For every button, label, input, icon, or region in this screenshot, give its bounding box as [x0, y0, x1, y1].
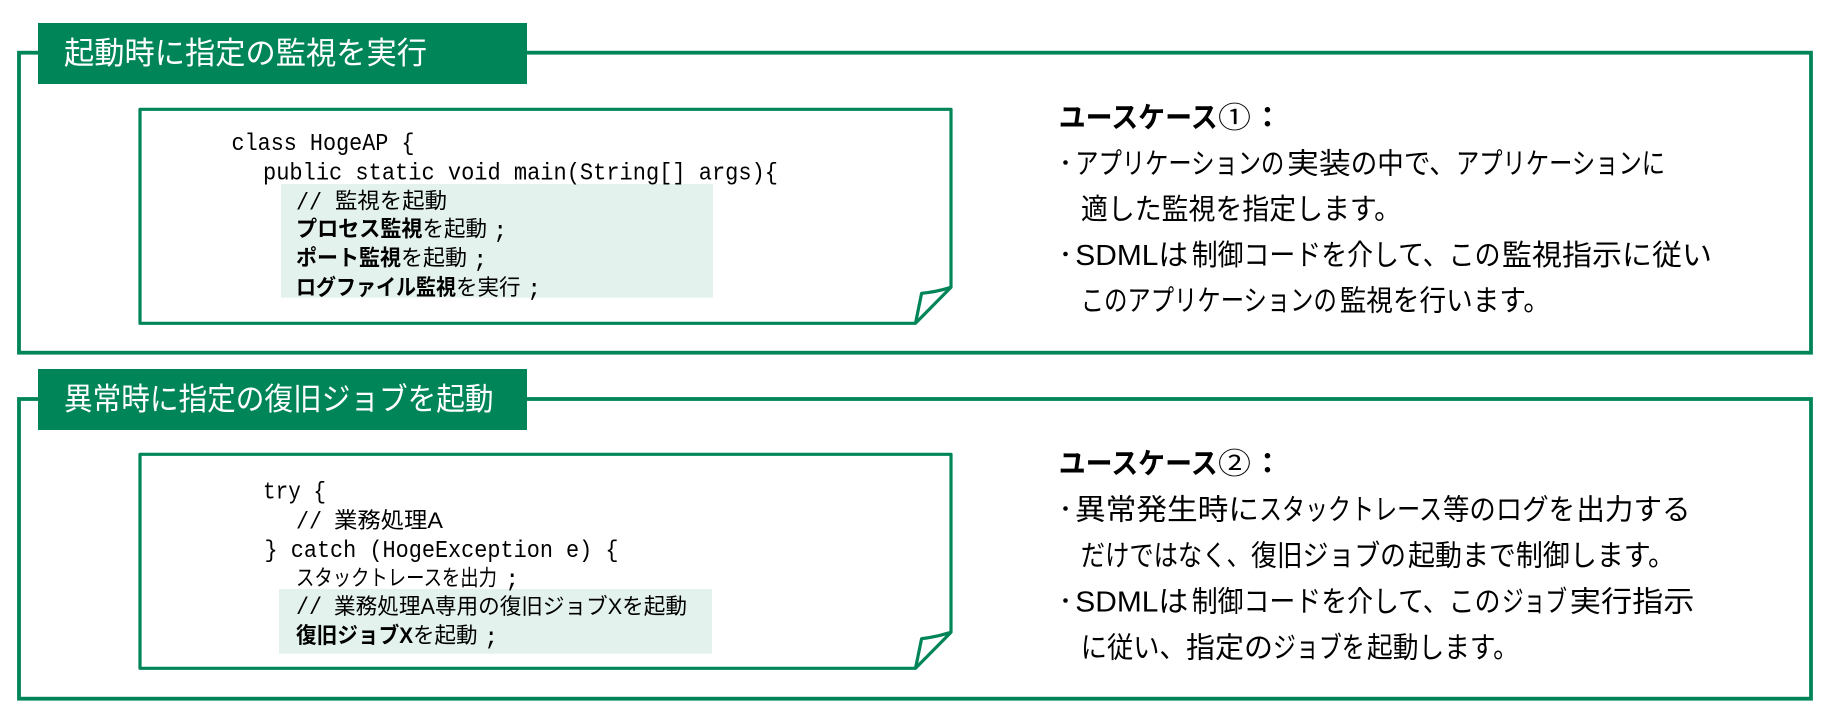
use case 1 text: 監視指示に従い: [1502, 239, 1712, 272]
code note: startup monitoring: class HogeAP {: [232, 131, 414, 158]
use case 1 text: 監視を行います。: [1340, 285, 1550, 318]
use case 1 text: アプリケーションに: [1456, 148, 1665, 180]
use case 1 text: ：: [1253, 102, 1282, 134]
use case 1 text: 制御コードを介して、この: [1192, 239, 1500, 272]
use case 1 text: SDMLは: [1075, 240, 1188, 272]
use case 2 text: 異常発生時に: [1075, 493, 1259, 526]
code note: recovery job: ;: [505, 568, 519, 594]
use case 1 text: 実装: [1287, 147, 1351, 180]
use case 2 text: 起動します。: [1367, 631, 1519, 664]
code note: recovery job: [140, 454, 951, 668]
code note: startup monitoring: 監視を起動: [335, 188, 447, 214]
heading: recovery job: [38, 369, 527, 430]
heading: startup monitoring: [38, 23, 527, 84]
use case 2 text: ：: [1253, 448, 1282, 480]
code note: recovery job: //: [296, 510, 322, 537]
code note: startup monitoring: ;: [473, 248, 487, 275]
panel: recovery job: [19, 369, 1811, 699]
code note: startup monitoring: ;: [493, 219, 507, 246]
use case 2 text: ジョブ: [1502, 585, 1567, 618]
code note: recovery job: 復旧ジョブX: [296, 623, 413, 648]
code note: recovery job: 業務処理A専用の復旧ジョブXを起動: [334, 594, 687, 619]
use case 2 text: 出力する: [1576, 493, 1691, 526]
code note: startup monitoring: ログファイル監視: [296, 275, 456, 300]
use case 2 text: に従い、: [1081, 631, 1186, 664]
use case 2 text: [1059, 448, 1694, 664]
code note: recovery job: //: [296, 595, 322, 622]
use case 2 text: ②: [1218, 448, 1251, 480]
use case 2 text: 起動まで制御します。: [1408, 539, 1675, 572]
use case 2 text: 実行指示: [1570, 585, 1694, 618]
use case 1 text: の中で、: [1351, 147, 1456, 180]
code note: recovery job: } catch (HogeException e) {: [264, 538, 618, 565]
code note: startup monitoring: ポート監視: [296, 246, 401, 271]
panel frame: [19, 53, 1811, 353]
code note: recovery job: try {: [263, 480, 326, 507]
code note: startup monitoring: を起動: [401, 246, 467, 271]
use case 2 text: スタックトレース: [1259, 494, 1442, 526]
use case 2 text: 指定の: [1186, 631, 1273, 664]
use case 2 text: SDMLは: [1075, 586, 1188, 618]
use case 1 text: このアプリケーションの: [1081, 286, 1337, 318]
code note: startup monitoring: を実行: [456, 275, 520, 300]
use case 1 text: アプリケーションの: [1075, 148, 1284, 180]
use case 2 text: ジョブを: [1273, 631, 1365, 664]
use case 2 text: 等のログを: [1443, 493, 1575, 526]
use case 1 text: ユースケース: [1059, 102, 1218, 134]
use case 1 text: [1059, 102, 1712, 318]
panel: startup monitoring: [19, 23, 1811, 353]
code note: startup monitoring: [140, 109, 951, 323]
code note: startup monitoring: ;: [527, 277, 541, 304]
use case 2 text: だけではなく、: [1081, 540, 1251, 572]
code note: startup monitoring: public static void main(String[] args){: [263, 160, 778, 187]
use case 2 text: ユースケース: [1059, 448, 1218, 480]
code note: recovery job: を起動: [413, 623, 478, 648]
code note: startup monitoring: プロセス監視: [296, 217, 422, 242]
heading: startup monitoring: 起動時に指定の監視を実行: [64, 36, 427, 71]
code note: startup monitoring: //: [296, 190, 322, 217]
heading: recovery job: 異常時に指定の復旧ジョブを起動: [64, 382, 494, 417]
code note: recovery job: スタックトレースを出力: [296, 565, 497, 590]
code note: startup monitoring: を起動: [422, 217, 487, 242]
panel frame: [19, 399, 1811, 699]
use case 1 text: ①: [1218, 102, 1251, 134]
code note: recovery job: 業務処理A: [334, 508, 443, 533]
code note: recovery job: ;: [484, 626, 498, 652]
use case 2 text: 復旧ジョブの: [1251, 539, 1406, 572]
use case 1 text: 適した監視を指定します。: [1081, 193, 1401, 226]
use case 2 text: 制御コードを介して、この: [1192, 585, 1500, 618]
